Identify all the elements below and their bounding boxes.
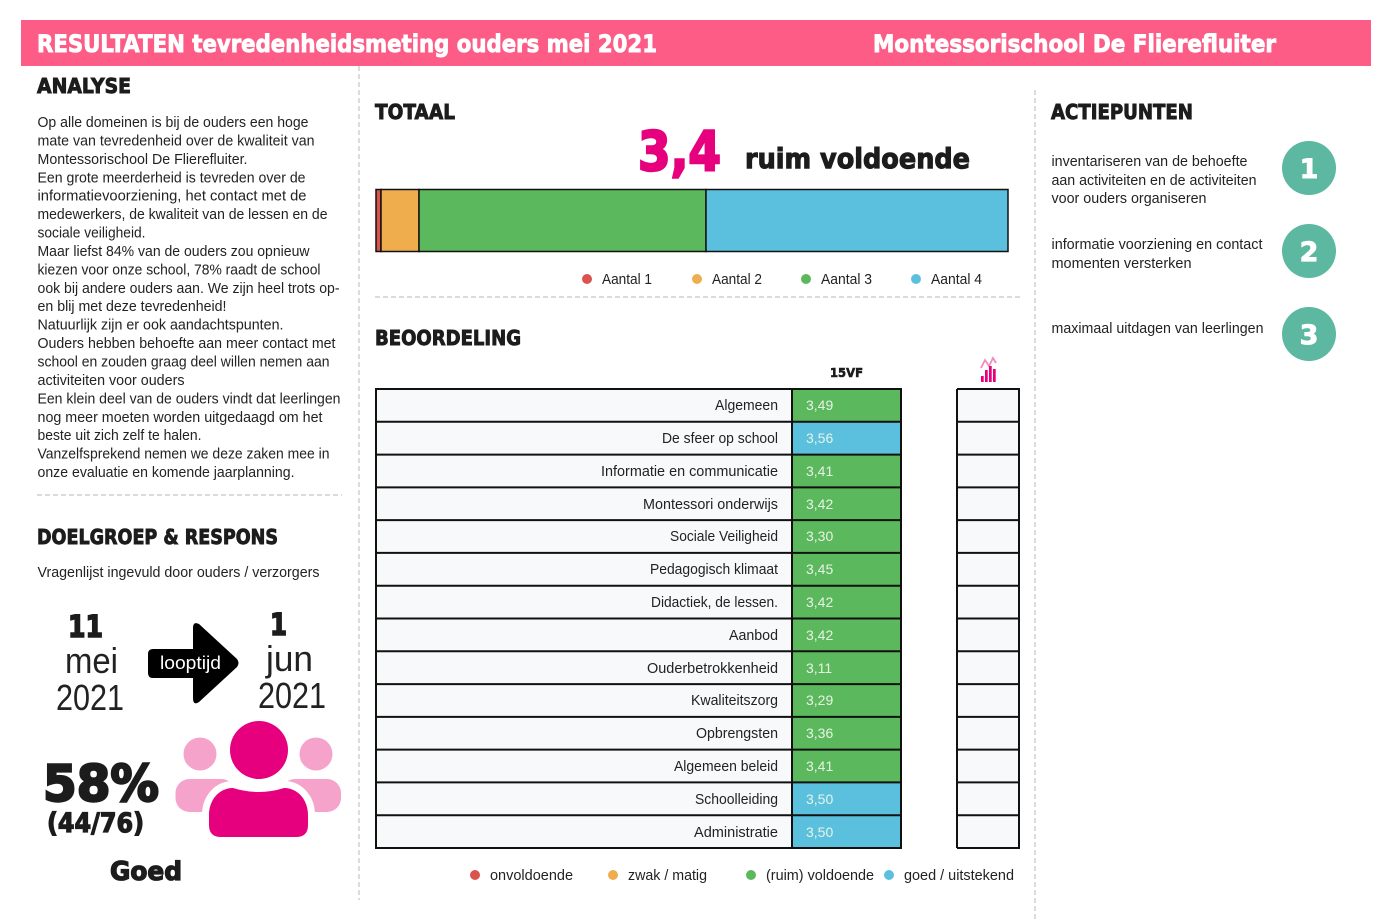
row values: 3,42 [806,496,833,512]
row values: 3,42 [806,627,833,643]
row labels: Ouderbetrokkenheid [647,661,778,677]
row labels: Pedagogisch klimaat [650,562,778,578]
row labels: Didactiek, de lessen. [651,595,778,611]
analysis text block: medewerkers, de kwaliteit van de lessen en de [38,207,328,223]
panel: totaal [375,100,1008,288]
analysis text block: beste uit zich zelf te halen. [38,428,202,444]
row labels: Sociale Veiligheid [670,529,778,545]
response percentage: 58% [43,755,159,813]
action 3 badge [1282,307,1336,361]
end date: jun [265,638,313,679]
start date [56,610,124,718]
row labels: Schoolleiding [695,792,778,808]
legend: beoordeling: onvoldoende [490,868,573,884]
legend: aantal: Aantal 2 [712,272,762,288]
row labels: De sfeer op school [662,431,778,447]
legend: aantal: Aantal 3 [821,272,872,288]
row values: 3,41 [806,758,833,774]
analysis text block: informatievoorziening, het contact met de [38,189,306,205]
response count: (44/76) [47,808,144,839]
action 1 badge: 1 [1300,154,1318,185]
legend: aantal: Aantal 1 [602,272,652,288]
heading: doelgroep en respons: DOELGROEP & RESPONS [37,525,278,549]
action 1 badge [1282,141,1336,195]
action 1 text: inventariseren van de behoefte [1052,154,1248,170]
panel: beoordeling [375,326,1020,884]
action 2 text: momenten versterken [1052,256,1192,272]
analysis text block: Een grote meerderheid is tevreden over de [38,170,306,186]
action 2 badge: 2 [1300,237,1318,268]
analysis text block: Op alle domeinen is bij de ouders een hoge [38,115,308,131]
analysis text block: Een klein deel van de ouders vindt dat leerlingen [38,391,340,407]
analysis text block: ook bij andere ouders aan. We zijn heel trots op- [38,281,340,297]
analysis text block: sociale veiligheid. [38,226,146,242]
start date: mei [65,640,118,681]
row labels: Informatie en communicatie [601,464,778,480]
row labels: Kwaliteitszorg [691,693,778,709]
panel: actiepunten [1051,100,1336,361]
analysis text block: activiteiten voor ouders [38,373,184,389]
legend: beoordeling [470,868,1014,884]
analysis text block: nog meer moeten worden uitgedaagd om het [38,410,322,426]
row values: 3,50 [806,824,833,840]
row labels: Algemeen beleid [674,759,778,775]
end date: 2021 [258,675,326,716]
panel: doelgroep en respons [37,525,341,887]
column header: 15VF: 15VF [830,365,863,380]
row values: 3,36 [806,725,833,741]
doelgroep description: Vragenlijst ingevuld door ouders / verzorgers [38,565,320,581]
analysis text block: Natuurlijk zijn er ook aandachtspunten. [38,318,284,334]
row values: 3,41 [806,463,833,479]
icon: people [176,721,341,837]
start date: 11 [68,610,103,645]
row labels: Montessori onderwijs [643,497,778,513]
arrow: looptijd: looptijd [160,653,221,673]
heading: actiepunten: ACTIEPUNTEN [1051,100,1193,124]
end date [258,608,326,716]
action 1 text: voor ouders organiseren [1052,191,1206,207]
stacked bar chart [376,190,1008,252]
row values: 3,30 [806,528,833,544]
analysis text block [38,115,340,481]
analysis text block: Maar liefst 84% van de ouders zou opnieuw [38,244,310,260]
row labels: Administratie [694,825,778,841]
action 3 text: maximaal uitdagen van leerlingen [1052,321,1264,337]
school name: Montessorischool De Flierefluiter [873,30,1276,58]
legend: beoordeling: zwak / matig [628,868,707,884]
row labels: Aanbod [729,628,778,644]
analysis text block: kiezen voor onze school, 78% raadt de school [38,262,320,278]
panel: analyse [37,74,340,481]
total verdict: ruim voldoende [745,142,970,175]
analysis text block: mate van tevredenheid over de kwaliteit van [38,133,314,149]
legend: beoordeling: (ruim) voldoende [766,868,874,884]
action 2 badge [1282,224,1336,278]
end date: 1 [270,608,287,643]
action 1 text [1052,154,1256,207]
action 2 text: informatie voorziening en contact [1052,237,1262,253]
arrow: looptijd [148,623,238,703]
row values: 3,50 [806,791,833,807]
analysis text block: en blij met deze tevredenheid! [38,299,226,315]
row values: 3,49 [806,397,833,413]
row values: 3,42 [806,594,833,610]
row values: 3,29 [806,692,833,708]
legend: aantal [582,272,982,288]
heading: beoordeling: BEOORDELING [375,326,521,350]
row labels: Opbrengsten [696,726,778,742]
score table [375,389,1020,848]
icon: chart [981,358,996,382]
legend: beoordeling: goed / uitstekend [904,868,1014,884]
analysis text block: Montessorischool De Flierefluiter. [38,152,248,168]
legend: aantal: Aantal 4 [931,272,982,288]
heading: totaal: TOTAAL [375,100,455,124]
row labels [601,398,778,841]
action 1 text: aan activiteiten en de activiteiten [1052,173,1256,189]
action 2 text [1052,237,1262,272]
analysis text block: onze evaluatie en komende jaarplanning. [38,465,294,481]
start date: 2021 [56,677,124,718]
analysis text block: Vanzelfsprekend nemen we deze zaken mee in [38,447,330,463]
row values: 3,11 [806,660,832,676]
title: RESULTATEN tevredenheidsmeting ouders mei 2021 [37,30,657,58]
analysis text block: school en zouden graag deel willen nemen aan [38,354,330,370]
rating: goed: Goed [110,857,182,887]
header banner [21,20,1371,66]
row values: 3,56 [806,430,833,446]
row values [806,397,833,840]
action 3 badge: 3 [1300,320,1318,351]
total score: 3,4 [638,120,721,183]
analysis text block: Ouders hebben behoefte aan meer contact met [38,336,336,352]
row values: 3,45 [806,561,833,577]
heading: analyse: ANALYSE [37,74,131,98]
row labels: Algemeen [715,398,778,414]
